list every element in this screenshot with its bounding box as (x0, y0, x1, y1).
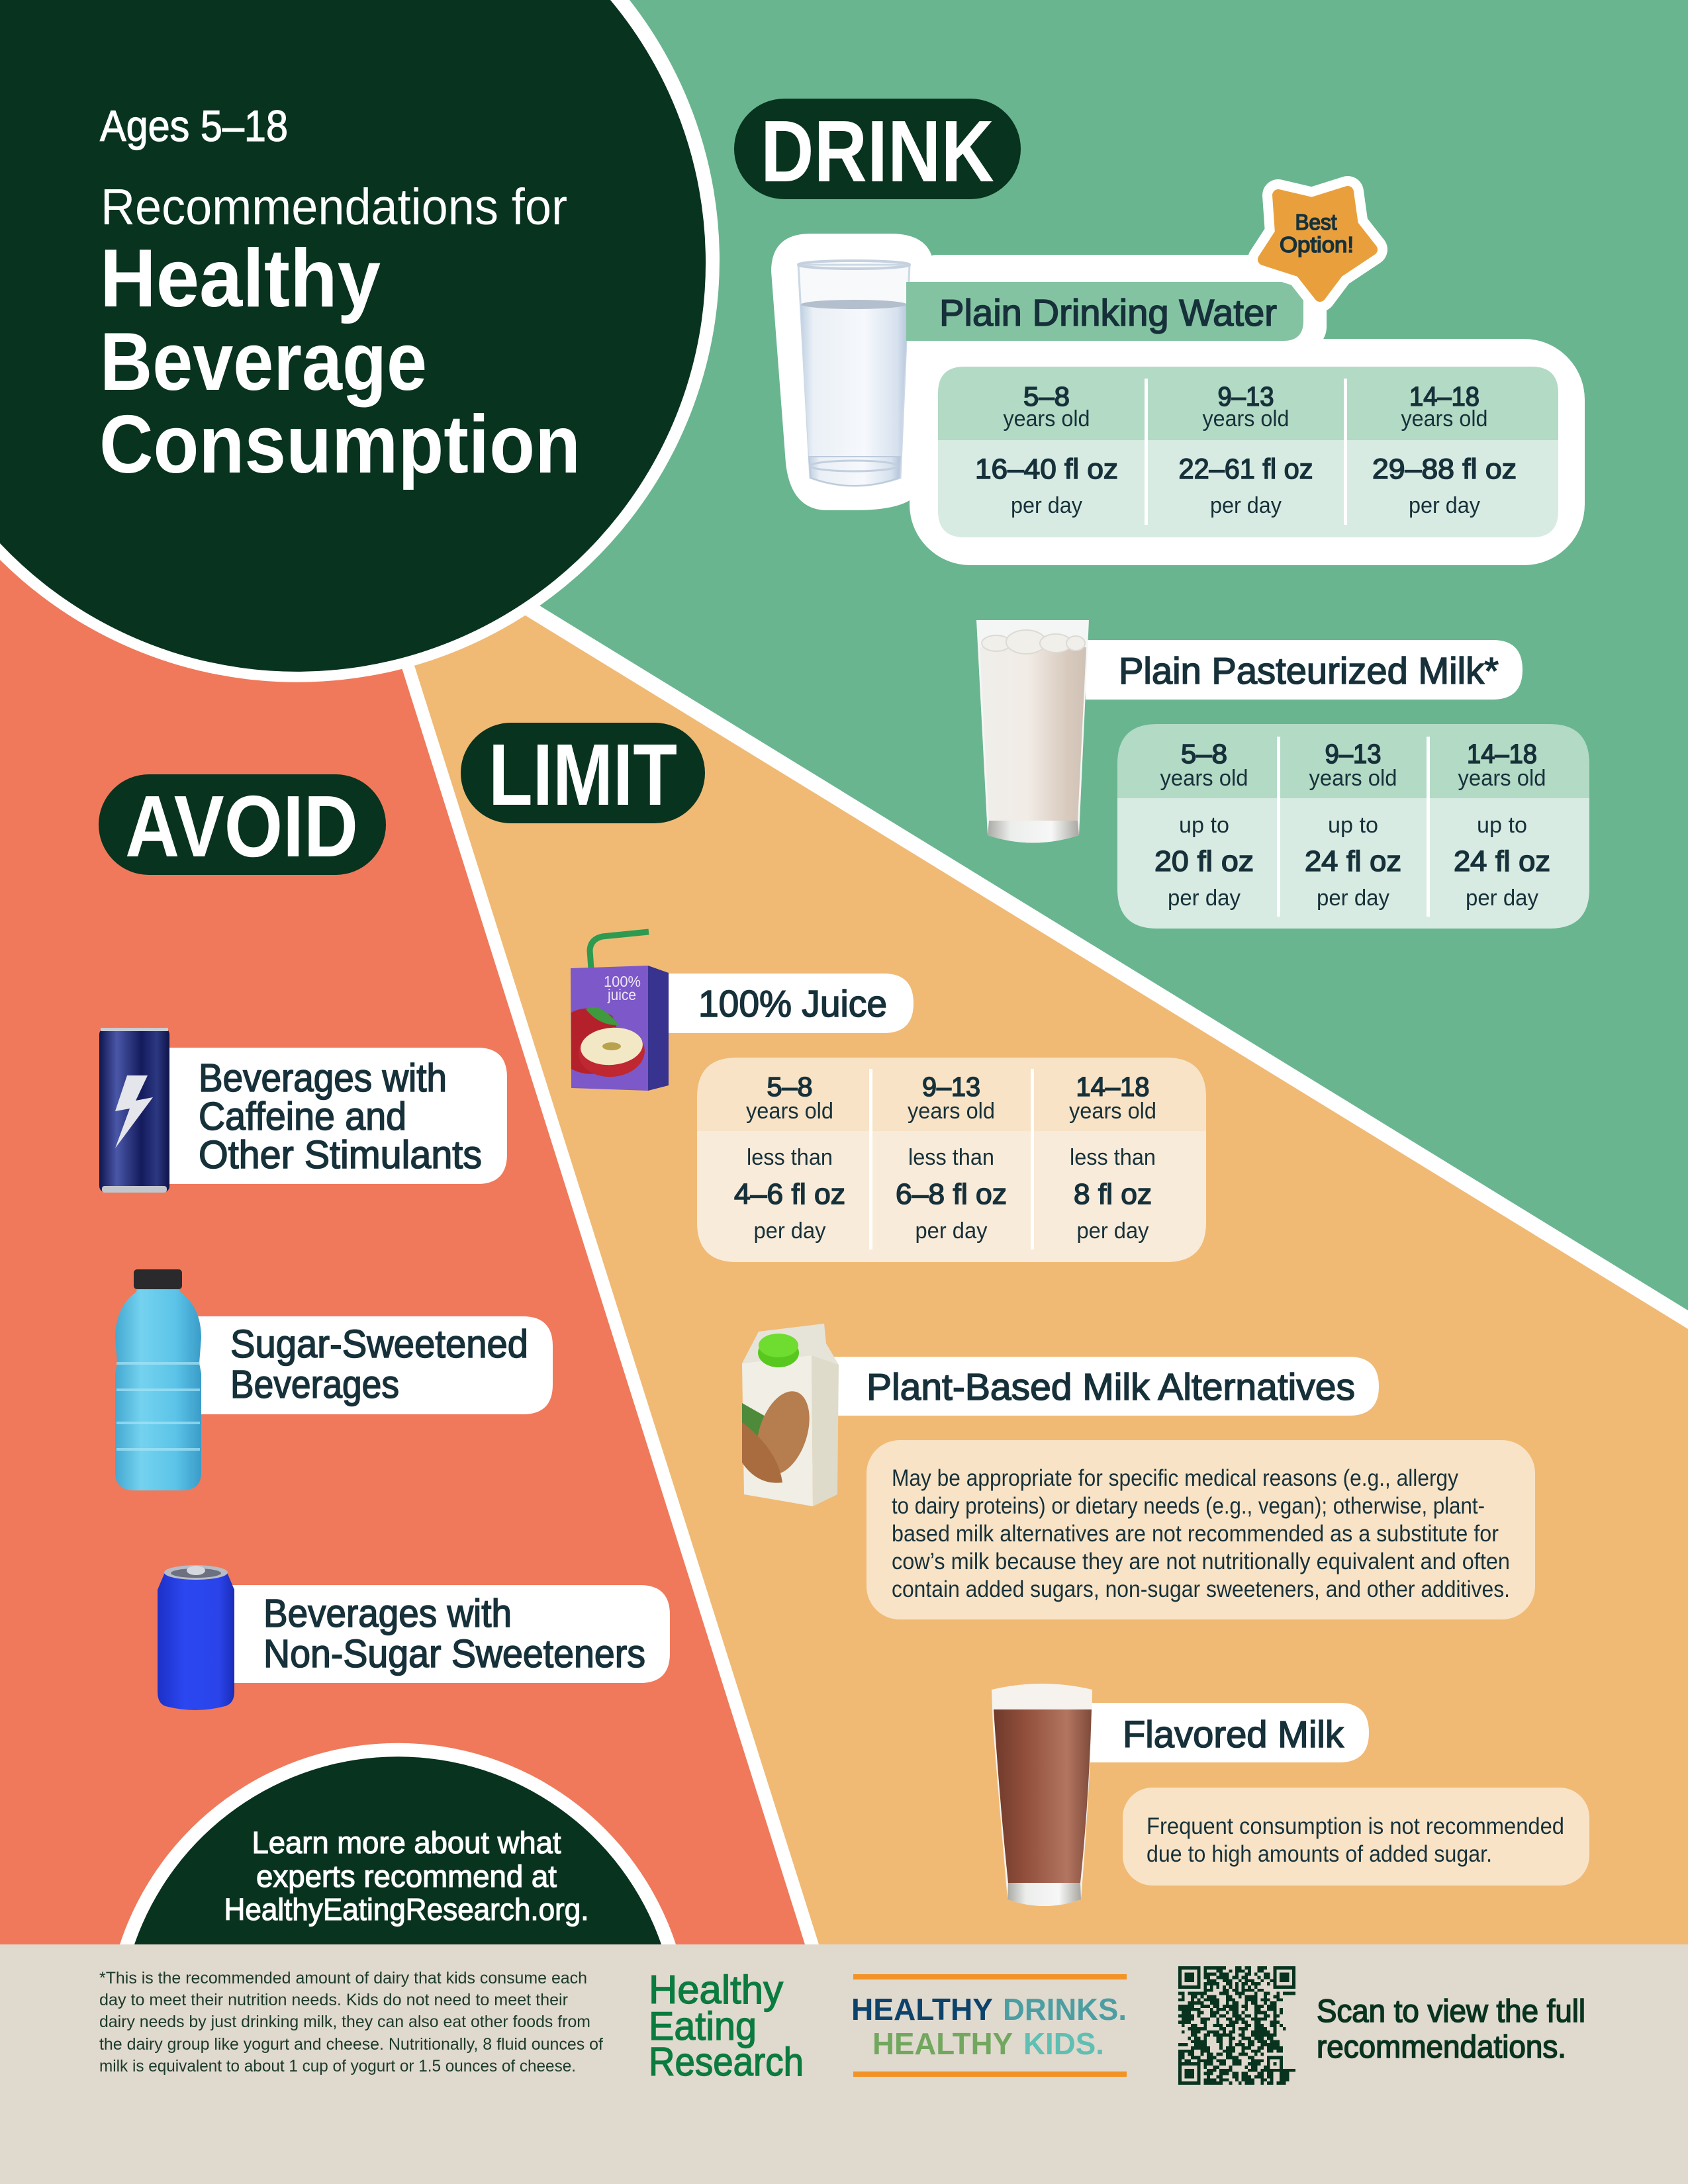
table: water amounts by age: years old (1202, 406, 1289, 432)
logo: healthy eating research (649, 1968, 804, 2084)
label: plant-based milk alternatives (834, 1357, 1379, 1416)
icon: glass of water (798, 261, 910, 486)
text box: plant-based note: based milk alternatives are not recommended as a substitute for (892, 1521, 1499, 1547)
table: milk amounts by age: per day (1317, 886, 1389, 911)
table: juice amounts by age: 5–8 (767, 1071, 813, 1102)
table: water amounts by age: per day (1409, 493, 1480, 518)
icon: juice box: juice (607, 986, 636, 1003)
table: water amounts by age: 29–88 fl oz (1372, 453, 1517, 485)
table: juice amounts by age: less than (1070, 1145, 1156, 1170)
table: water amounts by age: 5–8 (1023, 381, 1070, 412)
logo: healthy eating research: Healthy (649, 1968, 783, 2012)
table: water amounts by age (938, 367, 1558, 537)
footnote: milk is equivalent to about 1 cup of yogurt or 1.5 ounces of cheese. (99, 2057, 576, 2075)
table: milk amounts by age: 5–8 (1181, 739, 1227, 769)
label: beverages with caffeine and other stimulants: Caffeine and (199, 1095, 406, 1138)
logo: healthy eating research: Eating (649, 2004, 757, 2048)
panel: sugar-sweetened beverages (115, 1269, 553, 1490)
text box: plant-based note: May be appropriate for specific medical reasons (e.g., allergy (892, 1465, 1458, 1491)
table: juice amounts by age: per day (1076, 1218, 1149, 1244)
heading: LIMIT: LIMIT (489, 726, 677, 823)
label: beverages with caffeine and other stimulants: Beverages with (199, 1056, 447, 1100)
logo: healthy drinks healthy kids (851, 1974, 1127, 2077)
panel: 100% juice (571, 932, 1206, 1262)
label: 100% juice: 100% Juice (698, 983, 887, 1025)
table: milk amounts by age: 9–13 (1325, 739, 1381, 769)
text box: plant-based note (867, 1440, 1535, 1619)
table: water amounts by age: per day (1210, 493, 1282, 518)
callout: learn more arch: experts recommend at (256, 1859, 557, 1893)
text: scan to view (1317, 1994, 1585, 2065)
badge: best option star: Option! (1280, 232, 1354, 257)
table: milk amounts by age: up to (1477, 813, 1527, 838)
footnote (99, 1969, 603, 2075)
panel: caffeine and stimulants (99, 1028, 507, 1193)
table: water amounts by age: 16–40 fl oz (975, 453, 1118, 485)
table: milk amounts by age: years old (1458, 766, 1546, 791)
label: beverages with non-sugar sweeteners: Non-Sugar Sweeteners (263, 1632, 645, 1676)
title: Consumption (99, 399, 581, 490)
table: water amounts by age: 14–18 (1409, 381, 1479, 412)
table: juice amounts by age: 4–6 fl oz (734, 1178, 845, 1210)
label: plain drinking water (906, 282, 1303, 341)
label: plant-based milk alternatives: Plant-Based Milk Alternatives (867, 1366, 1355, 1408)
footnote: day to meet their nutrition needs. Kids do not need to meet their (99, 1991, 568, 2009)
label: 100% juice (665, 974, 914, 1033)
title: Healthy (100, 233, 381, 324)
text box: plant-based note: contain added sugars, non-sugar sweeteners, and other additives. (892, 1576, 1510, 1602)
subtitle: ages: Ages 5–18 (100, 101, 288, 150)
logo: healthy drinks healthy kids: HEALTHY (872, 2026, 1013, 2061)
callout: learn more arch: Learn more about what (252, 1825, 561, 1860)
table: juice amounts by age: per day (753, 1218, 826, 1244)
text: scan to view: Scan to view the full (1317, 1994, 1585, 2029)
table: milk amounts by age: up to (1328, 813, 1378, 838)
label: plain pasteurized milk: Plain Pasteurized Milk* (1119, 650, 1499, 692)
table: juice amounts by age: 8 fl oz (1074, 1178, 1152, 1210)
background: drink wedge (0, 0, 1688, 1320)
label: sugar-sweetened beverages (196, 1316, 553, 1414)
panel: plant-based milk alternatives (742, 1324, 1535, 1619)
table: juice amounts by age (697, 1058, 1206, 1262)
text: scan to view: recommendations. (1317, 2030, 1566, 2065)
table: milk amounts by age: per day (1466, 886, 1538, 911)
subtitle: recommendations: Recommendations for (101, 179, 567, 236)
callout: learn more arch (120, 1743, 676, 1944)
table: milk amounts by age: 24 fl oz (1454, 845, 1550, 878)
panel: plain drinking water (771, 192, 1585, 565)
table: juice amounts by age: less than (747, 1145, 833, 1170)
panel: flavored milk (992, 1684, 1589, 1906)
heading: AVOID: AVOID (125, 778, 358, 875)
table: juice amounts by age: less than (908, 1145, 994, 1170)
table: juice amounts by age: per day (915, 1218, 988, 1244)
table: milk amounts by age: 24 fl oz (1305, 845, 1401, 878)
table: water amounts by age: 9–13 (1218, 381, 1274, 412)
heading: DRINK: DRINK (761, 103, 994, 200)
table: milk amounts by age: years old (1160, 766, 1248, 791)
logo: healthy drinks healthy kids: HEALTHY (851, 1992, 993, 2026)
label: plain drinking water: Plain Drinking Water (939, 292, 1277, 334)
table: juice amounts by age: years old (908, 1099, 995, 1124)
table: milk amounts by age: 20 fl oz (1154, 845, 1254, 878)
footer band (0, 1944, 1688, 2184)
label: beverages with caffeine and other stimulants: Other Stimulants (199, 1133, 482, 1177)
text box: flavored milk note: due to high amounts of added sugar. (1147, 1841, 1492, 1867)
panel: plain pasteurized milk (976, 620, 1589, 929)
table: juice amounts by age: 14–18 (1076, 1071, 1149, 1102)
icon: sports drink bottle (115, 1269, 201, 1490)
table: water amounts by age: per day (1011, 493, 1082, 518)
label: sugar-sweetened beverages: Sugar-Sweetened (230, 1322, 528, 1366)
callout: learn more arch: HealthyEatingResearch.org. (224, 1892, 589, 1927)
logo: healthy drinks healthy kids: DRINKS. (1003, 1992, 1127, 2026)
table: juice amounts by age: 9–13 (922, 1071, 980, 1102)
wedge divider: limit and avoid (350, 502, 819, 1944)
logo: healthy drinks healthy kids: KIDS. (1023, 2026, 1104, 2061)
icon: almond milk carton (742, 1324, 839, 1506)
table: milk amounts by age (1117, 724, 1589, 929)
label: beverages with caffeine and other stimulants (165, 1048, 507, 1184)
table: milk amounts by age: years old (1309, 766, 1397, 791)
title (99, 233, 581, 490)
label: flavored milk: Flavored Milk (1123, 1713, 1344, 1756)
label: sugar-sweetened beverages: Beverages (230, 1363, 399, 1406)
table: water amounts by age: years old (1401, 406, 1488, 432)
logo: healthy eating research: Research (649, 2040, 804, 2084)
table: juice amounts by age: 6–8 fl oz (896, 1178, 1007, 1210)
table: juice amounts by age: years old (746, 1099, 833, 1124)
badge: best option star: Best (1295, 210, 1337, 234)
footnote: dairy needs by just drinking milk, they can also eat other foods from (99, 2013, 590, 2031)
table: water amounts by age: 22–61 fl oz (1178, 453, 1313, 485)
label: beverages with non-sugar sweeteners (230, 1585, 670, 1683)
text box: plant-based note: cow’s milk because they are not nutritionally equivalent and often (892, 1549, 1510, 1574)
icon: juice box: 100% (604, 973, 641, 990)
table: milk amounts by age: up to (1179, 813, 1229, 838)
label: beverages with non-sugar sweeteners: Beverages with (263, 1592, 512, 1635)
footnote: the dairy group like yogurt and cheese. Nutritionally, 8 fluid ounces of (99, 2035, 603, 2054)
icon: energy drink can (99, 1028, 169, 1193)
text box: flavored milk note: Frequent consumption is not recommended (1147, 1813, 1564, 1839)
title: Beverage (100, 316, 427, 408)
label: flavored milk (1089, 1703, 1369, 1762)
footnote: *This is the recommended amount of dairy that kids consume each (99, 1969, 587, 1987)
wedge divider: drink and limit (356, 493, 1688, 1329)
QR code (1178, 1966, 1295, 2085)
icon: glass of chocolate milk (992, 1684, 1092, 1906)
table: milk amounts by age: 14–18 (1467, 739, 1537, 769)
table: milk amounts by age: per day (1168, 886, 1241, 911)
label: plain pasteurized milk (1086, 640, 1523, 700)
white halo (771, 234, 1585, 565)
badge: best option star (1264, 192, 1372, 296)
icon: juice box (571, 932, 669, 1091)
icon: glass of milk (976, 620, 1089, 843)
background: limit wedge (356, 502, 1688, 1944)
text box: plant-based note: to dairy proteins) or dietary needs (e.g., vegan); otherwise, plant- (892, 1493, 1485, 1519)
table: water amounts by age: years old (1004, 406, 1090, 432)
table: juice amounts by age: years old (1069, 1099, 1156, 1124)
title circle (0, 0, 720, 682)
icon: soda can (158, 1565, 234, 1710)
text box: flavored milk note (1123, 1788, 1589, 1886)
panel: non-sugar sweeteners (158, 1565, 670, 1710)
